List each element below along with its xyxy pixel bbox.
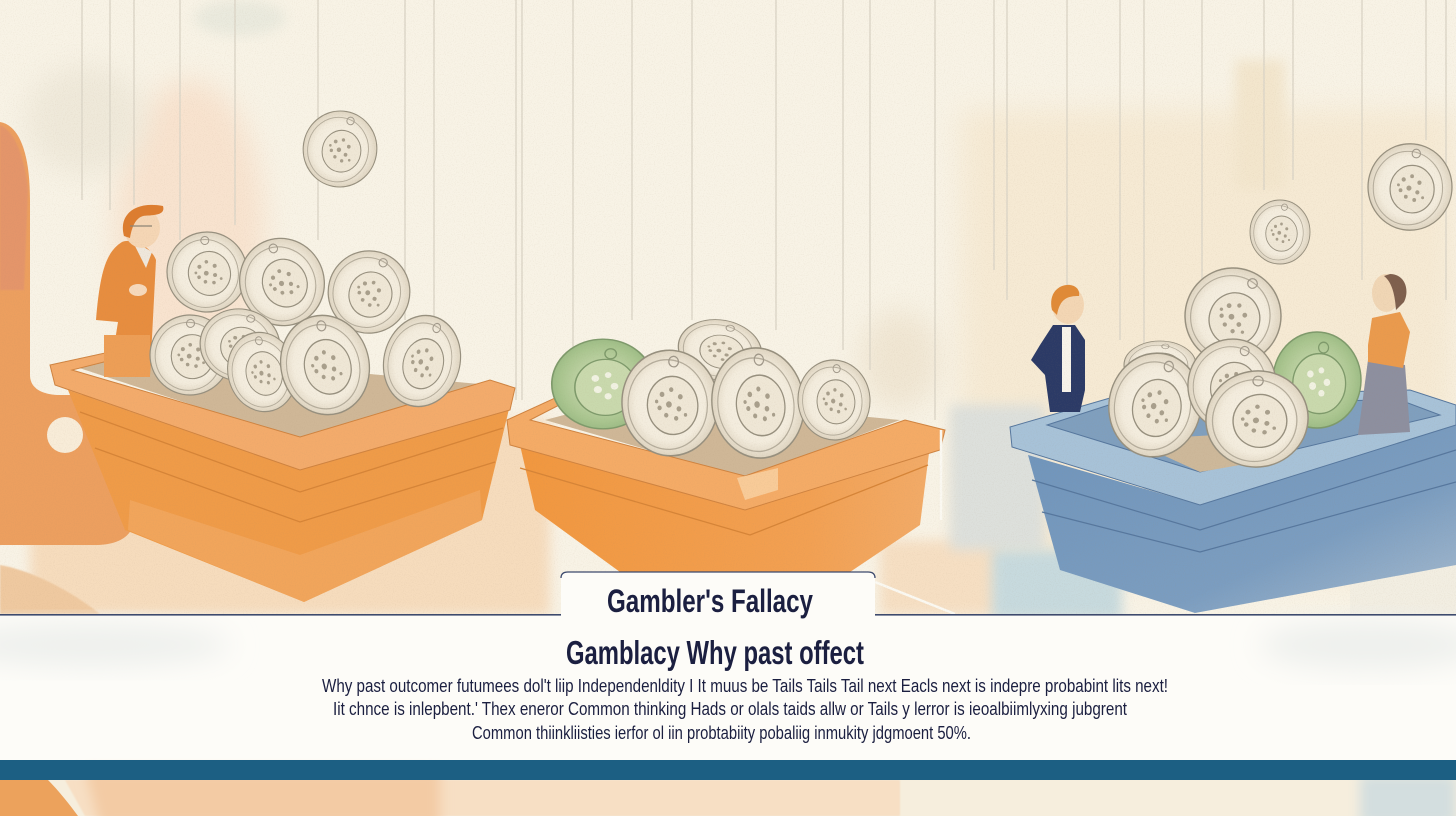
coin pile right bbox=[1101, 254, 1361, 475]
falling coins right bbox=[1250, 144, 1452, 264]
left wash darker strip bbox=[0, 125, 28, 290]
subtitle: Gamblacy Why past offect bbox=[566, 634, 864, 671]
white support lines bbox=[875, 430, 955, 614]
coin pile center bbox=[552, 313, 873, 464]
crate 3 bbox=[1010, 390, 1456, 613]
person: woman in orange blouse bbox=[1358, 274, 1410, 435]
body text: Iit chnce is inlepbent.' Thex eneror Common thinking Hads or olals taids allw or Tails y lerror is ieoalbiimlyxing jubgrent bbox=[333, 699, 1127, 719]
body text bbox=[322, 676, 1168, 743]
crate 2 bbox=[507, 395, 945, 572]
background vertical panel lines bbox=[82, 0, 1446, 420]
crate 1 bbox=[50, 352, 515, 602]
crate 2 interior bbox=[545, 395, 900, 478]
bottom left wash bbox=[0, 565, 100, 614]
caption panel bbox=[0, 614, 1456, 761]
crate 3 body bbox=[1028, 425, 1456, 613]
paper grain overlay bbox=[0, 0, 1456, 615]
title tab bbox=[561, 572, 875, 617]
crate 3 rim bbox=[1010, 390, 1456, 505]
title: Gambler's Fallacy bbox=[607, 583, 813, 619]
pale circle on left wash bbox=[47, 417, 83, 453]
crate 1 body bbox=[68, 390, 510, 602]
teal band bbox=[0, 760, 1456, 780]
coin pile left bbox=[144, 223, 471, 425]
left orange wash shape bbox=[0, 122, 135, 545]
panel mottled edges bbox=[0, 623, 230, 667]
bottom strip washes bbox=[0, 770, 1456, 816]
crate 2 rim bbox=[507, 398, 945, 510]
body text: Common thiinkliisties ierfor ol iin probtabiity pobaliig inmukity jdgmoent 50%. bbox=[472, 723, 971, 743]
crate 1 rim bbox=[50, 353, 515, 470]
crate 3 interior bbox=[1047, 400, 1440, 472]
background watercolor washes bbox=[25, 0, 1456, 620]
body text: Why past outcomer futumees dol't liip Independenldity I It muus be Tails Tails Tail next Eacls next is indepre probabint lits next! bbox=[322, 676, 1168, 696]
crate 1 interior bbox=[70, 352, 490, 440]
person: man with orange sweater bbox=[96, 205, 163, 377]
falling coin left bbox=[297, 105, 383, 193]
crate 2 body bbox=[520, 445, 930, 572]
person: man in navy suit bbox=[1031, 285, 1085, 412]
